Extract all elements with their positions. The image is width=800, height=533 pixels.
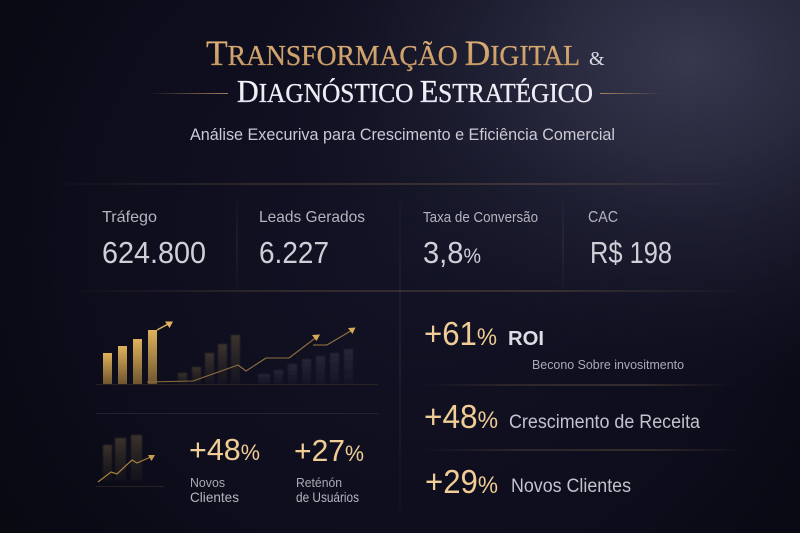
baseline	[96, 384, 378, 385]
KPI: Tráfego	[102, 209, 206, 270]
KPI: CAC	[588, 209, 672, 270]
stat: +61% ROI: Becono Sobre invositmento	[532, 357, 684, 372]
KPI: Tráfego: Tráfego	[102, 209, 157, 226]
title ornaments	[148, 93, 662, 94]
arrow: small trend	[98, 455, 155, 482]
KPI: Taxa de Conversão: Taxa de Conversão	[423, 209, 538, 226]
bright gold bars	[103, 330, 157, 384]
KPI: Tráfego: 624.800	[102, 235, 206, 270]
stat: +27% Retenção: Reténón	[296, 475, 342, 490]
divider	[420, 450, 745, 451]
stat: +61% ROI	[424, 315, 684, 372]
stat: +29% Novos Clientes: Novos Clientes	[511, 476, 631, 497]
stat: +61% ROI: +61%	[424, 315, 497, 352]
KPI: CAC: R$ 198	[590, 235, 672, 270]
faded gold bars	[178, 335, 240, 384]
stat: +48% Novos Clientes: +48%	[189, 432, 260, 467]
section rules	[40, 184, 750, 510]
baseline	[96, 486, 164, 487]
small trend chart	[96, 435, 164, 487]
KPI: CAC: CAC	[588, 209, 618, 226]
KPI: Leads Gerados	[259, 209, 365, 270]
stat: +27% Retenção: de Usuários	[296, 489, 359, 505]
arrow: secondary trend line	[313, 328, 356, 345]
KPI: Taxa de Conversão: 3,8%	[423, 235, 481, 270]
KPI row	[102, 209, 672, 270]
stat: +29% Novos Clientes	[425, 463, 631, 500]
title	[206, 33, 605, 109]
stat: +61% ROI: ROI	[508, 328, 544, 350]
arrow: main trend line	[147, 334, 320, 382]
stat: +48% Crescimento de Receita: Crescimento de Receita	[509, 412, 700, 433]
stat: +48% Crescimento de Receita	[424, 398, 700, 435]
divider	[420, 384, 735, 386]
growth bar chart	[96, 322, 378, 385]
ampersand: &	[589, 48, 605, 70]
stat: +27% Retenção	[294, 433, 364, 505]
KPI: Leads Gerados: Leads Gerados	[259, 209, 365, 226]
title line 1: TRANSFORMAÇÃO DIGITAL	[206, 33, 580, 73]
lower left divider	[96, 413, 378, 414]
KPI: Taxa de Conversão	[423, 209, 538, 270]
stat: +48% Novos Clientes: Clientes	[190, 489, 239, 505]
KPI: Leads Gerados: 6.227	[259, 235, 329, 270]
stat: +48% Crescimento de Receita: +48%	[424, 398, 498, 435]
subtitle: Análise Execuriva para Crescimento e Eficiência Comercial	[190, 126, 615, 144]
arrow: bright bars trend	[157, 322, 173, 330]
title line 2: DIAGNÓSTICO ESTRATÉGICO	[237, 73, 593, 109]
stat: +48% Novos Clientes	[189, 432, 260, 505]
faded bars	[103, 435, 142, 481]
stat: +48% Novos Clientes: Novos	[190, 475, 225, 490]
stat: +29% Novos Clientes: +29%	[425, 463, 498, 500]
faded grey bars	[258, 349, 353, 384]
stat: +27% Retenção: +27%	[294, 433, 364, 468]
